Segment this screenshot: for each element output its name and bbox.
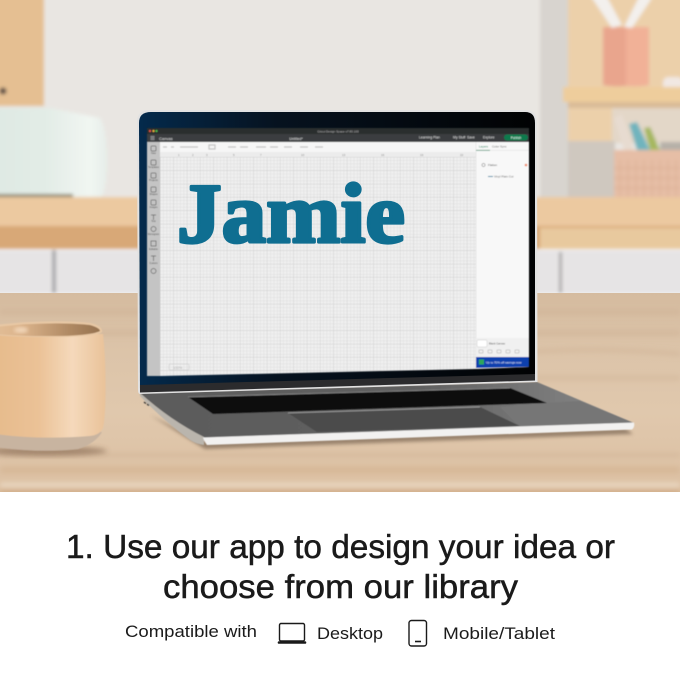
rulers: 16 xyxy=(381,153,385,157)
screen background xyxy=(147,128,529,376)
mug shadow xyxy=(0,446,107,456)
pegboard right xyxy=(568,0,680,141)
left tool sidebar: Editable xyxy=(149,248,158,251)
right layers panel: Layers xyxy=(479,144,489,148)
right layers panel: Color Sync xyxy=(492,144,507,148)
rulers: 19 xyxy=(420,153,424,157)
rulers: 5 xyxy=(233,153,235,157)
keyboard highlight xyxy=(188,388,510,397)
pencil cup xyxy=(590,0,652,86)
laptop xyxy=(137,110,634,449)
compatibility row xyxy=(125,620,555,646)
header bar: Publish xyxy=(511,136,521,140)
counter front xyxy=(0,226,680,249)
blank canvas row: Blank Canvas xyxy=(489,342,506,346)
zoom control: 100% xyxy=(173,366,183,370)
right layers panel: Vinyl Plain Cut xyxy=(494,174,514,178)
drawers xyxy=(0,250,680,294)
wooden cabinet left xyxy=(0,0,44,106)
mug stone base xyxy=(0,432,102,451)
left tool sidebar xyxy=(147,142,160,376)
zoom control xyxy=(169,364,189,370)
design text: Jamie: Jamie xyxy=(177,167,405,261)
mobile tablet label: Mobile/Tablet xyxy=(443,624,555,643)
counter top xyxy=(0,197,680,227)
desktop label: Desktop xyxy=(317,624,383,643)
toolbar xyxy=(160,142,476,152)
shelf xyxy=(563,87,680,102)
right layers panel xyxy=(476,142,529,369)
rulers: 13 xyxy=(342,153,346,157)
app screen xyxy=(147,128,529,376)
trackpad top highlight xyxy=(288,407,480,413)
heading: 1. Use our app to design your idea or xyxy=(66,529,615,566)
left tool sidebar: Custom xyxy=(149,262,158,265)
heading xyxy=(66,529,615,606)
ports xyxy=(144,402,149,406)
drawer gap right xyxy=(559,252,562,293)
rulers: 7 xyxy=(260,153,262,157)
laptop base xyxy=(140,382,634,445)
trackpad xyxy=(288,407,520,432)
base top deck xyxy=(140,382,634,438)
header bar: My Stuff xyxy=(453,136,465,140)
coffee mug xyxy=(0,321,107,456)
canvas grid xyxy=(160,157,476,376)
counter front right xyxy=(540,228,680,249)
desk grain xyxy=(0,312,680,492)
rulers xyxy=(160,152,476,157)
wall xyxy=(0,0,680,205)
compatible with label: Compatible with xyxy=(125,622,257,641)
left tool sidebar: Projects xyxy=(149,179,159,182)
right wall shade xyxy=(540,0,570,200)
hinge strip xyxy=(140,374,535,392)
blank canvas row xyxy=(476,338,529,358)
cabinet knob xyxy=(0,88,6,94)
rulers: 22 xyxy=(460,153,464,157)
left chrome side xyxy=(140,393,204,445)
header bar: Canvas xyxy=(159,136,173,141)
base front edge xyxy=(203,422,634,445)
left tool sidebar: Templates xyxy=(148,166,160,169)
title bar: Cricut Design Space v7.83.103 xyxy=(317,130,359,134)
icon: laptop xyxy=(279,624,305,642)
left tool sidebar: Text xyxy=(151,220,156,223)
white object on shelf xyxy=(663,77,680,92)
white caption panel xyxy=(0,492,680,680)
laptop shadow on the desk xyxy=(150,415,633,449)
basket mesh xyxy=(614,160,680,198)
rulers: 1 xyxy=(178,153,180,157)
basket contents xyxy=(614,114,680,151)
header bar: Untitled* xyxy=(289,137,303,141)
heading: choose from our library xyxy=(163,569,518,606)
wall below the pegboard xyxy=(568,141,615,199)
icon: phone xyxy=(409,620,426,646)
left tool sidebar: Images xyxy=(150,206,158,209)
shelf shadow xyxy=(568,102,680,108)
machine slot xyxy=(0,194,73,200)
promo banner xyxy=(476,357,529,368)
photo: blurred kitchen background xyxy=(0,0,680,294)
rulers: 3 xyxy=(206,153,208,157)
wall under shelf xyxy=(612,108,680,143)
lid black bezel xyxy=(139,112,535,392)
right layers panel: Flatten xyxy=(488,163,498,167)
lid silver edge xyxy=(137,110,538,394)
header bar: Save xyxy=(467,136,475,140)
wooden desk xyxy=(0,293,680,492)
rulers: 2 xyxy=(192,153,194,157)
left tool sidebar: Shapes xyxy=(149,193,158,196)
left tool sidebar: New xyxy=(151,152,156,155)
promo banner: Up to 70% off savings now xyxy=(486,360,522,364)
header bar xyxy=(147,134,529,142)
left tool sidebar: Monogram xyxy=(148,233,159,236)
mug rim and interior xyxy=(0,321,102,337)
mug body xyxy=(0,334,106,438)
basket xyxy=(614,150,680,203)
keyboard xyxy=(188,388,547,414)
cutting machine xyxy=(0,108,107,201)
header bar: Explore xyxy=(483,136,495,140)
rulers: 10 xyxy=(301,153,305,157)
drawer gap left xyxy=(52,250,56,293)
title bar xyxy=(147,128,529,134)
header bar: Learning Plan xyxy=(419,136,440,140)
deck side shading xyxy=(500,401,634,427)
